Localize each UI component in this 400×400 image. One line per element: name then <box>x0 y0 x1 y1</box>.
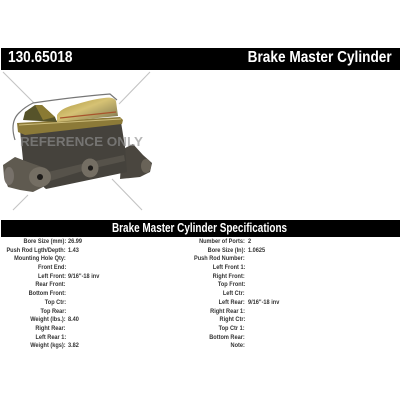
brake line <box>13 94 117 140</box>
front cylinder <box>3 157 50 192</box>
specs left column: Push Rod Lgth/Depth: <box>7 247 66 254</box>
specs left column: Front End: <box>38 264 66 271</box>
specs right column: Left Ctr: <box>223 290 245 297</box>
specs right column: Left Rear: <box>219 299 245 306</box>
specs left column: Bore Size (mm): <box>23 238 66 245</box>
specs left column: Left Front: <box>38 273 66 280</box>
specs left column: Right Rear: <box>36 325 66 332</box>
specs left column: Weight (kgs): <box>31 342 66 349</box>
product title: Brake Master Cylinder <box>248 49 392 66</box>
text: 9/16"-18 inv <box>68 273 99 280</box>
specs right column: Top Front: <box>217 281 245 288</box>
specs right column: Note: <box>231 342 245 349</box>
text: 26.99 <box>68 238 82 245</box>
specs right column <box>194 238 280 349</box>
text: 1.43 <box>68 247 79 254</box>
watermark cross lines <box>3 72 150 210</box>
specs left column: Weight (lbs.): <box>31 316 66 323</box>
text: 3.82 <box>68 342 79 349</box>
specs left column <box>6 238 100 349</box>
specs right column: Bottom Rear: <box>209 334 245 341</box>
specs left column: Left Rear 1: <box>35 334 66 341</box>
specs left column: Bottom Front: <box>29 290 66 297</box>
specs right column: Push Rod Number: <box>194 255 245 262</box>
specs right column: Right Ctr: <box>219 316 245 323</box>
specs right column: Number of Ports: <box>199 238 245 245</box>
specs left column: Top Ctr: <box>45 299 66 306</box>
watermark text: REFERENCE ONLY <box>20 135 144 149</box>
specs left column: Top Rear: <box>40 308 66 314</box>
text: 1.0625 <box>248 247 265 254</box>
specs left column: Rear Front: <box>36 281 66 288</box>
rear mounting flange <box>120 144 152 179</box>
specs left column: Mounting Hole Qty: <box>14 255 66 262</box>
port bosses <box>29 167 51 187</box>
header bar <box>1 48 400 70</box>
specs right column: Left Front 1: <box>212 264 245 271</box>
specs right column: Right Rear 1: <box>210 308 245 314</box>
body lower rib <box>48 155 125 181</box>
specifications heading: Brake Master Cylinder Specifications <box>112 221 287 235</box>
product illustration: brake master cylinder <box>2 72 152 210</box>
cylinder body <box>20 122 127 189</box>
specs right column: Bore Size (In): <box>207 247 245 254</box>
text: 8.40 <box>68 316 79 323</box>
reservoir cap: large <box>57 98 118 122</box>
specs right column: Top Ctr 1: <box>219 325 245 332</box>
text: 2 <box>248 238 251 245</box>
lid rim <box>17 117 123 135</box>
specs right column: Right Front: <box>213 273 245 280</box>
part number: 130.65018 <box>8 49 72 66</box>
reservoir cap: small <box>23 105 57 122</box>
text: 9/16"-18 inv <box>248 299 279 306</box>
specifications bar <box>1 220 400 237</box>
